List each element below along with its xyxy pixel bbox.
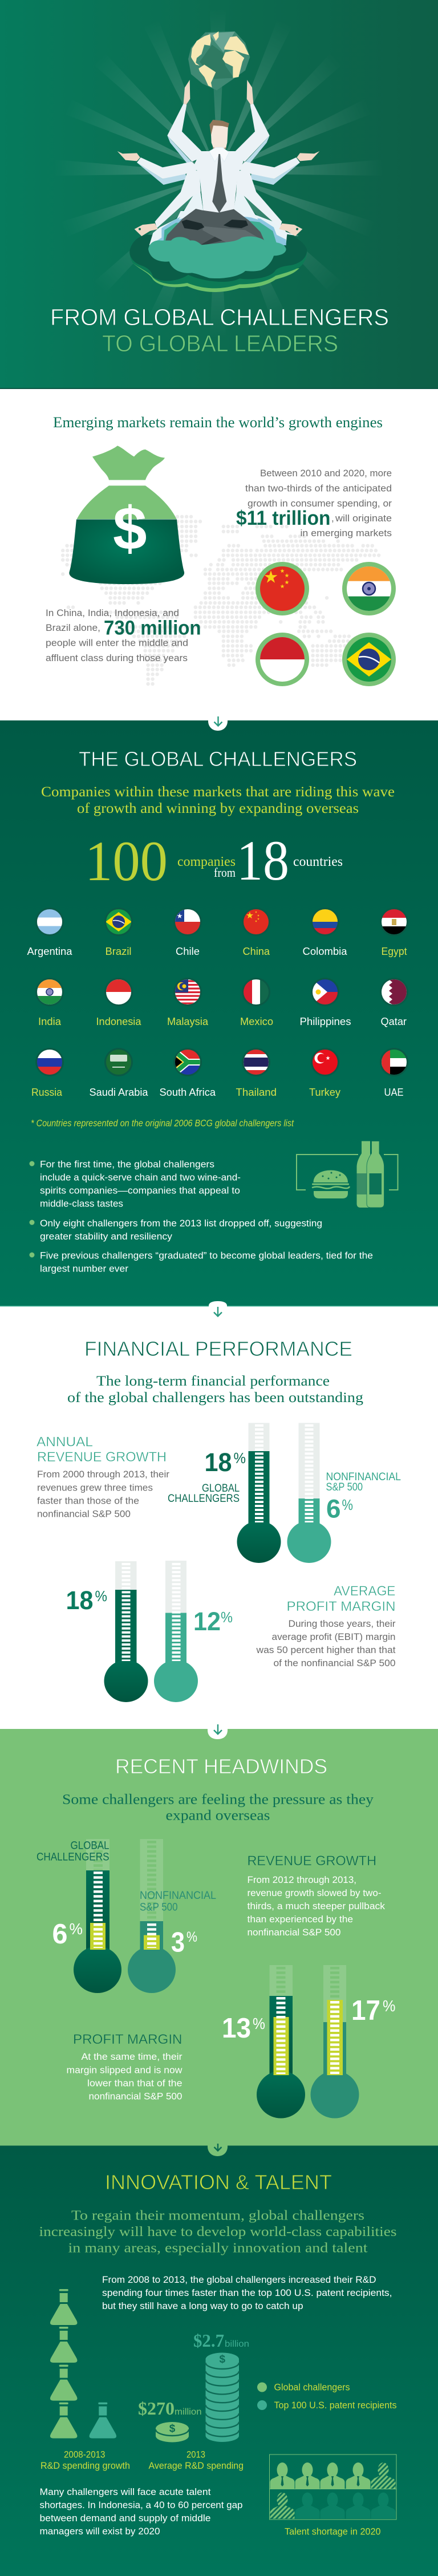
subheading: Companies within these markets that are riding this wave — [41, 784, 395, 800]
icon: flag indonesia — [256, 633, 309, 686]
Brazil — [104, 908, 133, 936]
text: profit margin: At the same time, their — [81, 2051, 182, 2062]
stat: 100 companies from 18 countries: companies — [177, 854, 236, 869]
text: middle class: affluent class during those years — [46, 653, 188, 663]
text: average profit margin: AVERAGE — [334, 1583, 396, 1599]
text: annual revenue growth: From 2000 through 2013, their — [37, 1469, 169, 1480]
subheading — [39, 2209, 397, 2255]
flag labels: Russia — [31, 1087, 63, 1098]
Russia — [35, 1048, 64, 1076]
panel: hero — [0, 0, 438, 389]
text: middle class: Brazil alone, — [46, 622, 100, 633]
flag labels: Brazil — [105, 946, 131, 957]
panel: innovation and talent — [0, 2144, 438, 2576]
value: 18 percent margin: % — [95, 1587, 107, 1605]
text: revenue growth: REVENUE GROWTH — [248, 1853, 376, 1869]
flag labels: Argentina — [27, 946, 73, 957]
text: consumer spending: , — [331, 513, 334, 524]
label: nonfinancial: S&P 500 — [326, 1481, 363, 1493]
icon: tall coin stack — [205, 2352, 239, 2442]
Philippines — [311, 978, 339, 1006]
label: nonfinancial: NONFINANCIAL — [140, 1890, 216, 1902]
Malaysia — [173, 978, 202, 1006]
text: profit margin: lower than that of the — [87, 2078, 182, 2089]
label: average R&D spending: Average R&D spending — [148, 2461, 244, 2471]
label: average R&D spending — [148, 2449, 244, 2471]
text: revenue growth — [248, 1853, 386, 1938]
subheading: of growth and winning by expanding overseas — [77, 801, 359, 816]
bullet list: Five previous challengers “graduated” to become global leaders, tied for the — [40, 1250, 373, 1261]
icon: money bag: $ — [113, 494, 147, 562]
heading: INNOVATION & TALENT — [105, 2170, 332, 2194]
text: revenue growth: revenue growth slowed by two- — [248, 1888, 381, 1898]
footnote: * Countries represented on the original 2006 BCG global challengers list — [31, 1118, 294, 1128]
Egypt — [380, 908, 408, 936]
Thailand — [242, 1048, 270, 1076]
text: consumer spending: $11 trillion — [236, 507, 331, 529]
value: 3 percent: 3 — [171, 1927, 185, 1958]
text: profit margin — [66, 2032, 182, 2101]
flags grid — [35, 908, 408, 1076]
label: R&D spending growth: R&D spending growth — [40, 2461, 130, 2471]
icon: flask, patent recipients — [90, 2403, 116, 2439]
value: 3 percent: % — [186, 1929, 197, 1945]
thermometer: S&P margin 12% — [154, 1561, 198, 1702]
text: profit margin: margin slipped and is now — [66, 2065, 182, 2075]
icon: flag china — [256, 562, 309, 615]
value: 18 percent margin — [66, 1586, 107, 1615]
flag labels: Saudi Arabia — [89, 1087, 148, 1098]
text: average profit margin: of the nonfinancial S&P 500 — [274, 1658, 396, 1668]
flag labels: Chile — [176, 946, 200, 957]
label: global challengers: CHALLENGERS — [168, 1493, 240, 1505]
thermometer: global challengers revenue growth 6% — [74, 1839, 121, 1993]
stat: 100 companies from 18 countries: 100 — [85, 829, 168, 893]
text: consumer spending: growth in consumer spending, or — [248, 498, 392, 509]
text: talent shortages — [40, 2487, 243, 2537]
stat: 100 companies from 18 countries: countries — [293, 854, 343, 869]
flag labels: Egypt — [381, 946, 407, 957]
flag labels: Qatar — [381, 1016, 407, 1027]
icon: globe — [188, 31, 250, 90]
heading: Emerging markets remain the world’s growth engines — [53, 414, 383, 431]
text: average profit margin: average profit (EBIT) margin — [271, 1631, 396, 1642]
South Africa — [173, 1048, 202, 1076]
panel: emerging markets — [46, 416, 396, 686]
Turkey — [311, 1048, 339, 1076]
chart: talent shortage people — [269, 2455, 396, 2520]
value: 18 percent: 18 — [204, 1448, 232, 1477]
thermometer: global challengers margin 13% — [257, 1965, 305, 2119]
value: 18 percent: % — [234, 1449, 246, 1467]
China — [242, 908, 270, 936]
label: nonfinancial: NONFINANCIAL — [326, 1471, 401, 1483]
subheading: To regain their momentum, global challengers — [71, 2209, 364, 2223]
subheading: Some challengers are feeling the pressure as they — [62, 1792, 374, 1808]
value: 6 percent: 6 — [326, 1494, 341, 1524]
value: 18 percent — [204, 1448, 246, 1477]
text: average profit margin: During those years, their — [289, 1618, 396, 1629]
value: 18 percent margin: 18 — [66, 1586, 94, 1615]
panel: recent headwinds — [0, 1724, 438, 2145]
Qatar — [380, 978, 408, 1006]
value: 270 million — [138, 2398, 202, 2419]
legend: Global challengers — [274, 2382, 350, 2392]
icon: platform and shirt tails — [129, 211, 307, 292]
flag labels: India — [38, 1016, 62, 1027]
label: R&D spending growth — [40, 2449, 130, 2471]
label: global challengers: CHALLENGERS — [36, 1852, 110, 1864]
flag labels: Colombia — [302, 946, 348, 957]
text: middle class: In China, India, Indonesia, and — [46, 607, 179, 618]
label: talent shortage: Talent shortage in 2020 — [285, 2527, 381, 2537]
value: 13 percent: 13 — [222, 2013, 251, 2044]
flag labels: Indonesia — [96, 1016, 141, 1027]
label: nonfinancial: S&P 500 — [140, 1902, 178, 1914]
icon: money bag — [69, 445, 184, 584]
text: revenue growth: nonfinancial S&P 500 — [248, 1927, 341, 1938]
text: consumer spending: in emerging markets — [300, 528, 392, 538]
value: 6 percent: 6 — [52, 1919, 67, 1950]
text: R&D spending: but they still have a long way to go to catch up — [102, 2301, 303, 2311]
Indonesia — [104, 978, 133, 1006]
value: 17 percent: % — [383, 1997, 396, 2015]
flag labels — [27, 946, 407, 1098]
title: from global challengers: FROM GLOBAL CHALLENGERS — [50, 304, 389, 330]
value: 2.7 billion — [193, 2330, 249, 2351]
Argentina — [35, 908, 64, 936]
value: 17 percent: 17 — [351, 1995, 380, 2026]
value: 12 percent margin: % — [221, 1609, 233, 1626]
panel: the global challengers — [0, 716, 438, 1306]
stat: 100 companies from 18 countries: 18 — [237, 829, 289, 892]
text: annual revenue growth: ANNUAL — [36, 1434, 93, 1450]
label: average R&D spending: 2013 — [186, 2449, 205, 2460]
bullet list: For the first time, the global challengers — [40, 1159, 214, 1169]
value: 270 million: million — [175, 2407, 202, 2417]
icon: meditating businessman — [117, 80, 319, 236]
flag labels: South Africa — [160, 1087, 216, 1098]
icon: flask stack, global challengers — [50, 2289, 77, 2439]
Mexico — [242, 978, 270, 1006]
subheading — [62, 1792, 374, 1824]
icon: flag brazil — [342, 633, 396, 686]
text: profit margin: nonfinancial S&P 500 — [89, 2091, 182, 2101]
icon: legs and foreground cloud — [148, 209, 286, 278]
text: talent shortages: shortages. In Indonesia, a 40 to 60 percent gap — [40, 2500, 243, 2510]
flag labels: Turkey — [309, 1087, 340, 1098]
arrow connector — [209, 1301, 227, 1317]
label: nonfinancial — [326, 1471, 401, 1493]
heading: RECENT HEADWINDS — [115, 1755, 327, 1778]
text: average profit margin: PROFIT MARGIN — [286, 1599, 396, 1614]
text: annual revenue growth — [36, 1434, 169, 1520]
heading: FINANCIAL PERFORMANCE — [84, 1337, 352, 1360]
text: revenue growth: than experienced by the — [248, 1914, 353, 1925]
bullet list: greater stability and resiliency — [40, 1231, 173, 1242]
text: average profit margin: was 50 percent higher than that — [256, 1645, 396, 1655]
value: 2.7 billion: billion — [225, 2339, 249, 2349]
flag labels: UAE — [384, 1087, 404, 1098]
text: consumer spending: than two-thirds of the anticipated — [245, 483, 392, 493]
thermometer: global challengers margin 18% — [104, 1561, 148, 1702]
value: 6 percent — [52, 1919, 83, 1950]
text: annual revenue growth: REVENUE GROWTH — [37, 1449, 167, 1465]
flag labels: Malaysia — [167, 1016, 209, 1027]
subheading: expand overseas — [165, 1808, 270, 1824]
text: revenue growth: thirds, a much steeper pullback — [248, 1901, 386, 1911]
icon: burger and bottles — [297, 1141, 398, 1208]
text: R&D spending — [102, 2275, 392, 2311]
value: 13 percent: % — [253, 2015, 265, 2032]
panel: financial performance — [0, 1301, 438, 1729]
flag labels: China — [243, 946, 270, 957]
bullet list: Only eight challengers from the 2013 list dropped off, suggesting — [40, 1218, 322, 1229]
subheading — [41, 784, 395, 816]
bullet list: spirits companies—companies that appeal to — [40, 1185, 240, 1196]
value: 3 percent — [171, 1927, 197, 1958]
text: talent shortages: between demand and supply of middle — [40, 2513, 211, 2524]
text: consumer spending: will originate — [335, 513, 392, 524]
text: consumer spending — [236, 468, 392, 538]
bullet list: middle-class tastes — [40, 1198, 123, 1209]
thermometer: S&P revenue growth 3% — [128, 1839, 176, 1993]
label: nonfinancial — [140, 1890, 216, 1914]
decorative dotted world map — [63, 517, 383, 684]
text: middle class — [46, 607, 201, 663]
text: profit margin: PROFIT MARGIN — [73, 2032, 182, 2047]
subheading — [67, 1374, 364, 1406]
arrow connector — [208, 1724, 228, 1739]
India — [35, 978, 64, 1006]
label: R&D spending growth: 2008-2013 — [64, 2449, 105, 2460]
text: annual revenue growth: faster than those of the — [37, 1496, 139, 1506]
label: global challengers: GLOBAL — [71, 1840, 110, 1852]
bullet list — [30, 1159, 373, 1274]
arrow connector — [208, 2144, 228, 2156]
flag labels: Mexico — [240, 1016, 273, 1027]
bullet list: largest number ever — [40, 1263, 128, 1274]
Chile — [173, 908, 202, 936]
subheading: of the global challengers has been outstanding — [67, 1390, 364, 1406]
label: global challengers: GLOBAL — [202, 1483, 240, 1494]
UAE — [380, 1048, 408, 1076]
stat: 100 companies from 18 countries: from — [214, 865, 236, 880]
legend: Top 100 U.S. patent recipients — [274, 2400, 397, 2411]
Colombia — [311, 908, 339, 936]
text: revenue growth: From 2012 through 2013, — [248, 1874, 356, 1885]
subheading: The long-term financial performance — [96, 1374, 330, 1389]
icon: sun rays — [44, 0, 391, 347]
flag labels: Philippines — [300, 1016, 351, 1027]
flag labels: Thailand — [236, 1087, 277, 1098]
text: consumer spending: Between 2010 and 2020, more — [260, 468, 392, 479]
icon: tall coin stack: $ — [219, 2354, 225, 2366]
thermometer: global challengers revenue 18% — [237, 1423, 281, 1563]
value: 6 percent: % — [70, 1920, 83, 1938]
label: global challengers — [36, 1840, 110, 1864]
text: middle class: people will enter the middle and — [46, 638, 188, 649]
value: 2.7 billion: $2.7 — [193, 2330, 224, 2351]
value: 12 percent margin: 12 — [193, 1607, 221, 1636]
text: talent shortages: Many challengers will face acute talent — [40, 2487, 211, 2497]
text: talent shortages: managers will exist by 2020 — [40, 2526, 160, 2537]
icon: flag india — [342, 562, 396, 615]
arrow connector — [208, 716, 228, 731]
icon: small coin — [156, 2422, 189, 2443]
heading: THE GLOBAL CHALLENGERS — [79, 747, 357, 771]
subheading: increasingly will have to develop world-class capabilities — [39, 2225, 397, 2239]
Saudi Arabia — [104, 1048, 133, 1076]
text: average profit margin — [256, 1583, 396, 1668]
thermometer: S&P revenue 6% — [287, 1423, 331, 1563]
text: R&D spending: spending four times faster than the top 100 U.S. patent recipients, — [102, 2288, 392, 2298]
text: middle class: 730 million — [104, 617, 201, 639]
label: global challengers — [168, 1483, 240, 1505]
text: annual revenue growth: nonfinancial S&P 500 — [37, 1508, 131, 1520]
title: to global leaders: TO GLOBAL LEADERS — [102, 330, 338, 357]
subheading: in many areas, especially innovation and talent — [68, 2241, 368, 2255]
icon: small coin: $ — [169, 2423, 176, 2435]
value: 270 million: $270 — [138, 2398, 175, 2419]
bullet list: include a quick-serve chain and two wine-and- — [40, 1172, 241, 1183]
value: 6 percent — [326, 1494, 353, 1524]
stat: 100 companies from 18 countries — [85, 829, 343, 893]
text: annual revenue growth: revenues grew three times — [37, 1482, 153, 1493]
text: R&D spending: From 2008 to 2013, the global challengers increased their R&D — [102, 2275, 376, 2285]
legend — [257, 2382, 397, 2411]
value: 6 percent: % — [342, 1496, 353, 1513]
thermometer: S&P margin 17% — [310, 1965, 359, 2119]
